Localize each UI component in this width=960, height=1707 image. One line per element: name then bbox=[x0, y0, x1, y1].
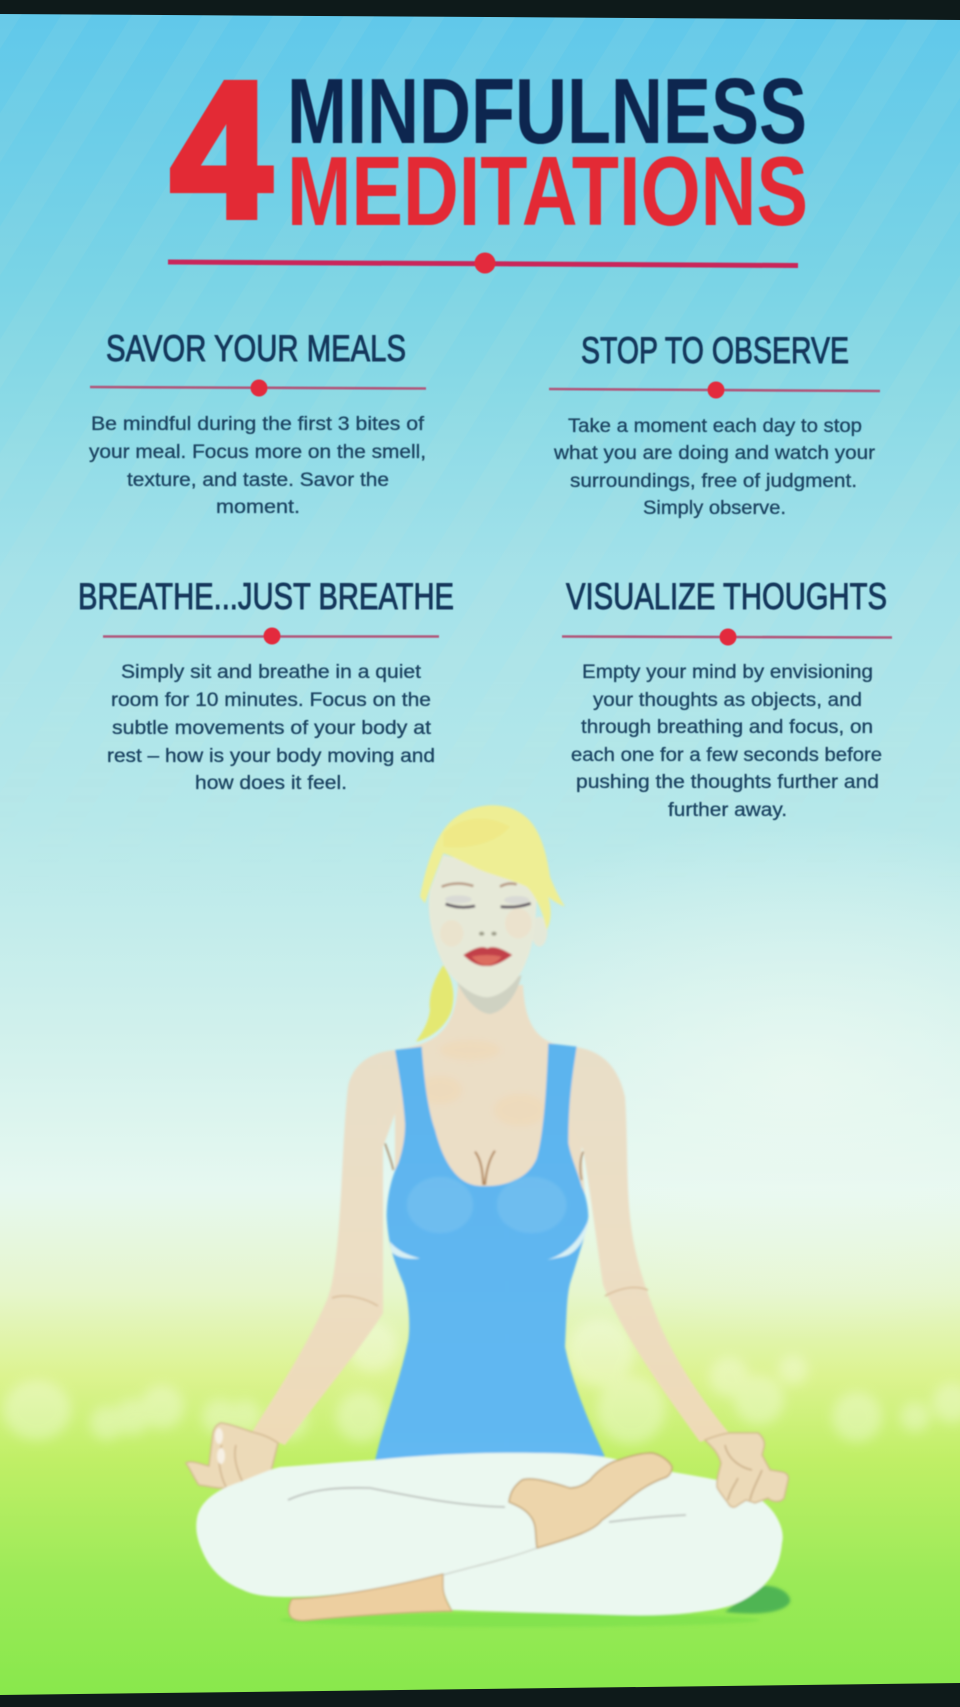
underarm creases bbox=[385, 1143, 583, 1180]
pants bbox=[196, 1453, 783, 1615]
body text: Simply sit and breathe in a quiet bbox=[121, 662, 422, 683]
body text bbox=[553, 416, 876, 519]
left hand bbox=[186, 1423, 278, 1489]
body text bbox=[107, 662, 435, 794]
body text: moment. bbox=[216, 497, 300, 518]
pant fold lines bbox=[288, 1488, 505, 1507]
chest and neck skin bbox=[395, 985, 585, 1200]
top foot bbox=[509, 1453, 672, 1548]
ponytail bbox=[416, 965, 453, 1042]
heading: STOP TO OBSERVE bbox=[581, 330, 849, 371]
body text: subtle movements of your body at bbox=[112, 718, 432, 739]
body text: what you are doing and watch your bbox=[553, 443, 876, 464]
cleavage line bbox=[475, 1151, 495, 1185]
body text: how does it feel. bbox=[195, 773, 347, 794]
body text: further away. bbox=[668, 800, 787, 821]
right arm bbox=[560, 1047, 729, 1442]
body text: Be mindful during the first 3 bites of bbox=[91, 414, 425, 435]
numeral 4: 4 bbox=[171, 42, 271, 257]
bust highlights bbox=[407, 1177, 567, 1233]
body text: surroundings, free of judgment. bbox=[570, 471, 857, 492]
cheeks bbox=[440, 920, 463, 947]
divider bbox=[549, 382, 880, 398]
ground shadow bbox=[280, 1586, 790, 1627]
illustration: meditating woman bbox=[186, 805, 790, 1627]
bottom foot bbox=[289, 1574, 452, 1621]
panel: savor your meals bbox=[89, 328, 426, 518]
right hand bbox=[705, 1433, 788, 1507]
chest tone patches bbox=[418, 1040, 546, 1126]
eyebrows bbox=[442, 883, 517, 887]
body text: through breathing and focus, on bbox=[581, 717, 873, 738]
nostrils bbox=[479, 932, 484, 936]
body text: Take a moment each day to stop bbox=[568, 416, 862, 437]
body text: room for 10 minutes. Focus on the bbox=[111, 690, 431, 711]
head bbox=[416, 805, 565, 1042]
body text: Empty your mind by envisioning bbox=[582, 662, 873, 683]
body text: Simply observe. bbox=[643, 498, 786, 519]
panel: stop to observe bbox=[549, 330, 880, 519]
lips bbox=[463, 947, 512, 966]
panel: breathe just breathe bbox=[78, 576, 454, 794]
title line: mindfulness: MINDFULNESS bbox=[287, 59, 807, 163]
hair bbox=[420, 805, 565, 930]
body text bbox=[89, 414, 426, 518]
elbow creases bbox=[332, 1288, 648, 1306]
body text: pushing the thoughts further and bbox=[576, 772, 879, 793]
divider bbox=[90, 380, 426, 396]
left arm bbox=[252, 1050, 400, 1445]
title line: meditations: MEDITATIONS bbox=[287, 136, 808, 246]
body text: each one for a few seconds before bbox=[571, 745, 882, 766]
heading: BREATHE...JUST BREATHE bbox=[78, 576, 454, 617]
divider bbox=[103, 628, 439, 644]
body text: texture, and taste. Savor the bbox=[127, 470, 389, 491]
ear bbox=[531, 917, 547, 947]
tank top bbox=[375, 1043, 605, 1461]
bokeh lights bbox=[3, 1319, 960, 1444]
title divider bbox=[168, 252, 798, 274]
body text bbox=[571, 662, 882, 821]
fabric highlights bbox=[390, 1242, 420, 1259]
body text: your thoughts as objects, and bbox=[593, 690, 862, 711]
face bbox=[429, 855, 537, 997]
panel: visualize thoughts bbox=[562, 576, 892, 821]
heading: SAVOR YOUR MEALS bbox=[106, 328, 406, 369]
body text: your meal. Focus more on the smell, bbox=[89, 442, 426, 463]
eyelids bbox=[446, 903, 531, 907]
divider bbox=[562, 628, 892, 646]
title bbox=[171, 42, 808, 257]
neck shadow bbox=[456, 975, 522, 1014]
body text: rest – how is your body moving and bbox=[107, 746, 435, 767]
